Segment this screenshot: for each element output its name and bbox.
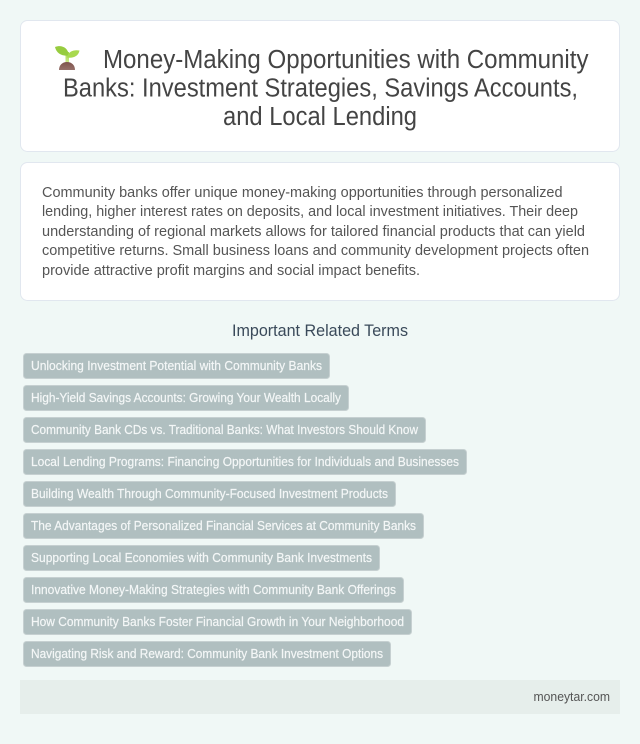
- tag 10: Navigating Risk and Reward: Community Bank Investment Options: [31, 646, 383, 661]
- intro paragraph: [42, 184, 589, 279]
- tag 8: Innovative Money-Making Strategies with Community Bank Offerings: [31, 582, 396, 597]
- footer bar: moneytar.com: [534, 689, 610, 704]
- tag 2: High-Yield Savings Accounts: Growing Your Wealth Locally: [31, 390, 342, 405]
- intro paragraph: competitive returns. Small business loans and community development projects often: [42, 242, 589, 259]
- tag 6: The Advantages of Personalized Financial Services at Community Banks: [31, 518, 416, 533]
- title text: and Local Lending: [223, 103, 417, 131]
- tag 2: [24, 386, 348, 410]
- icon: seedling: [55, 46, 80, 70]
- tag 5: Building Wealth Through Community-Focused Investment Products: [31, 486, 388, 501]
- tag 3: [24, 418, 426, 442]
- intro paragraph: lending, higher interest rates on deposits, and local investment initiatives. Their deep: [42, 203, 578, 220]
- tag 10: [24, 642, 390, 666]
- title text: Banks: Investment Strategies, Savings Accounts,: [63, 74, 578, 102]
- tag 5: [24, 482, 396, 506]
- footer bar: [20, 680, 620, 714]
- title text: [63, 46, 589, 131]
- panel: intro description: [20, 162, 620, 300]
- tag 8: [24, 578, 404, 602]
- intro paragraph: understanding of regional markets allows for tailored financial products that can yield: [42, 223, 585, 240]
- intro paragraph: provide attractive profit margins and social impact benefits.: [42, 262, 420, 279]
- intro paragraph: Community banks offer unique money-making opportunities through personalized: [42, 184, 562, 201]
- tag list: [24, 354, 466, 666]
- tag 1: [24, 354, 330, 378]
- heading: important related terms: Important Related Terms: [232, 321, 408, 340]
- tag 7: [24, 546, 380, 570]
- tag 9: How Community Banks Foster Financial Growth in Your Neighborhood: [31, 614, 404, 629]
- tag 7: Supporting Local Economies with Community Bank Investments: [31, 550, 372, 565]
- title text: Money-Making Opportunities with Community: [103, 46, 589, 74]
- tag 4: Local Lending Programs: Financing Opportunities for Individuals and Businesses: [31, 454, 459, 469]
- tag 1: Unlocking Investment Potential with Community Banks: [31, 358, 322, 373]
- tag 4: [24, 450, 466, 474]
- tag 9: [24, 610, 412, 634]
- panel: title card: [20, 20, 620, 152]
- tag 3: Community Bank CDs vs. Traditional Banks: What Investors Should Know: [31, 422, 419, 437]
- tag 6: [24, 514, 424, 538]
